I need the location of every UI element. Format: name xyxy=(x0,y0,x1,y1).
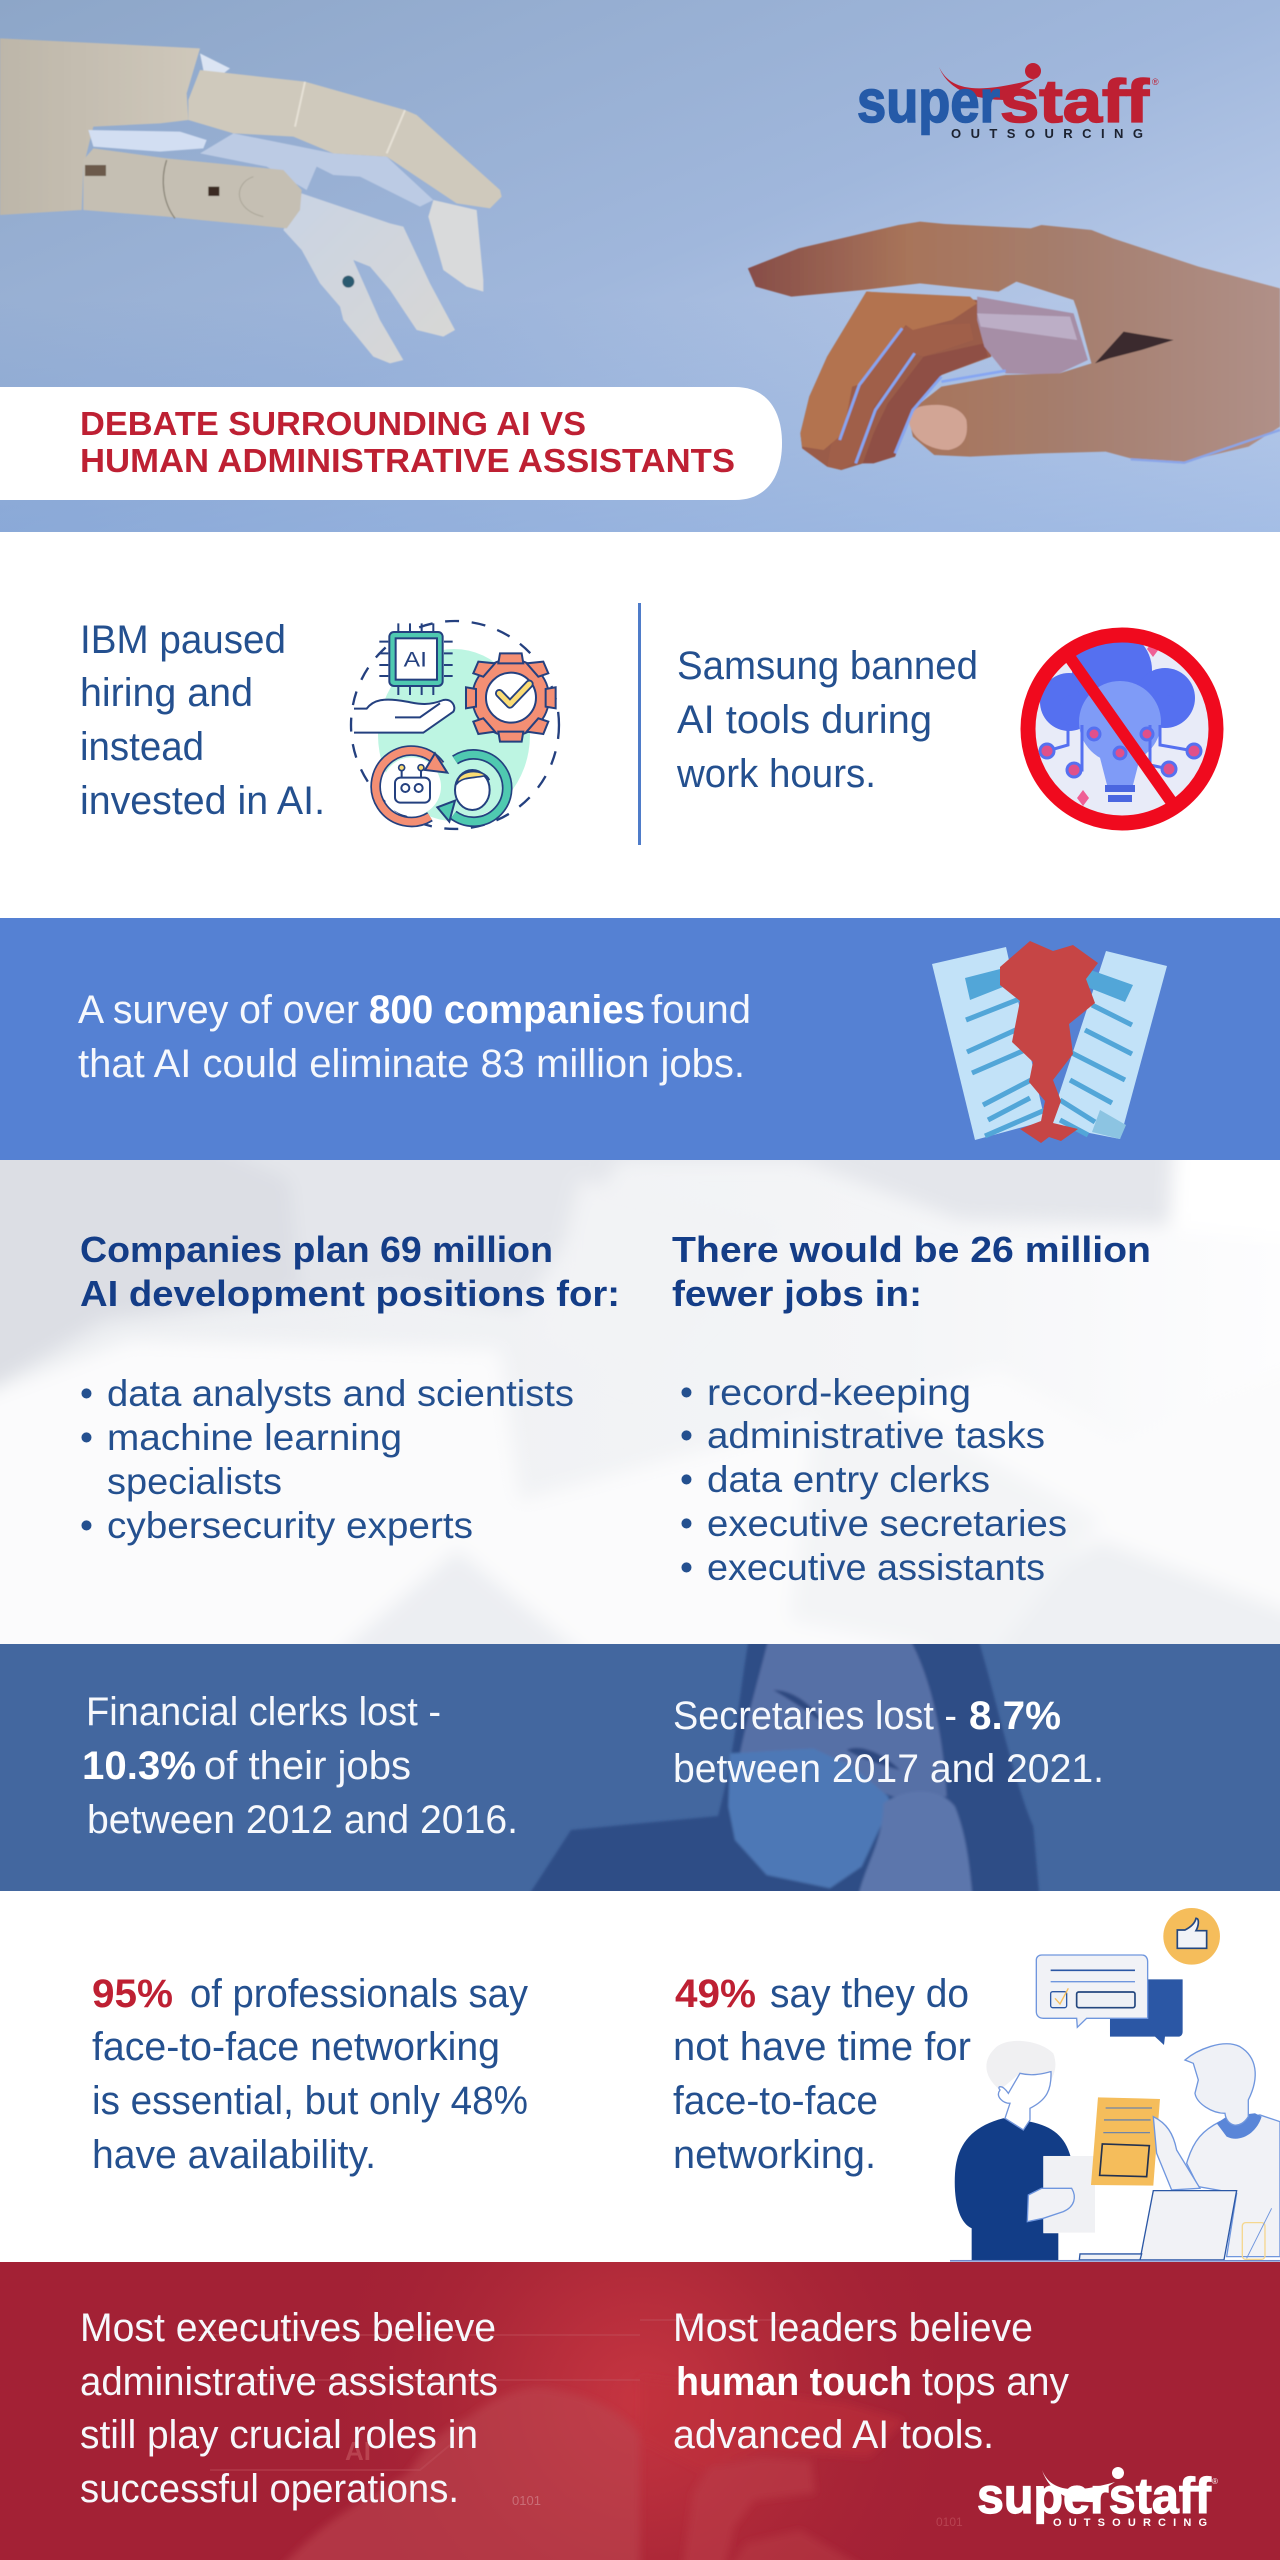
panel: networking xyxy=(0,1891,1280,2262)
divider xyxy=(638,603,641,845)
list: fewer jobs: • xyxy=(680,1503,693,1544)
text: financial clerks: Financial clerks lost - xyxy=(86,1690,441,1734)
panel: lost jobs band xyxy=(0,1633,1280,1903)
text: executives: successful operations. xyxy=(80,2467,459,2511)
text: survey: found xyxy=(651,988,751,1032)
text: secretaries: between 2017 and 2021. xyxy=(673,1747,1104,1791)
logo: superstaff top: super xyxy=(857,68,1000,135)
text: executives: still play crucial roles in xyxy=(80,2413,478,2457)
text: survey: that AI could eliminate 83 million jobs. xyxy=(78,1042,745,1086)
text: executives: Most executives believe xyxy=(80,2306,496,2350)
background photo: woman in mask xyxy=(523,1633,1040,1903)
text: Samsung: work hours. xyxy=(676,752,876,796)
text: leaders: tops any xyxy=(922,2360,1069,2404)
text: leaders: human touch xyxy=(676,2360,912,2404)
title xyxy=(80,405,735,479)
text: secretaries: 8.7% xyxy=(969,1694,1061,1738)
icon: chat bubbles xyxy=(1036,1955,1183,2045)
figure: left person xyxy=(955,2041,1095,2261)
illustration: two colleagues xyxy=(950,1908,1280,2262)
image: human hand xyxy=(748,222,1280,470)
text: 95 percent: is essential, but only 48% xyxy=(92,2079,528,2123)
text: IBM: invested in AI. xyxy=(80,779,325,823)
list: new positions: • xyxy=(80,1417,93,1458)
background photo: hands and circuitry xyxy=(200,2320,963,2560)
heading: 69 million: Companies plan 69 million xyxy=(80,1229,553,1270)
list: fewer jobs: • xyxy=(680,1547,693,1588)
logo: superstaff top xyxy=(857,63,1159,141)
text: 49 percent: networking. xyxy=(673,2133,876,2177)
background photo: hands and clipboard xyxy=(0,1140,1280,1670)
list: fewer jobs xyxy=(680,1372,1067,1588)
list: fewer jobs: record-keeping xyxy=(707,1372,971,1413)
background photo: hands and circuitry: AI xyxy=(345,2436,371,2466)
text: survey xyxy=(78,988,751,1086)
list: fewer jobs: • xyxy=(680,1372,693,1413)
logo: superstaff bottom: superstaff xyxy=(977,2468,1211,2524)
title: DEBATE SURROUNDING AI VS xyxy=(80,405,586,442)
text: 49 percent: face-to-face xyxy=(673,2079,878,2123)
text: Samsung: Samsung banned xyxy=(677,644,978,688)
heading: 69 million xyxy=(80,1229,620,1314)
text: secretaries xyxy=(673,1694,1104,1791)
panel: IBM and Samsung xyxy=(0,532,1280,918)
heading: 26 million: There would be 26 million xyxy=(672,1229,1151,1270)
text: 95 percent: of professionals say xyxy=(190,1972,528,2016)
list: fewer jobs: executive secretaries xyxy=(707,1503,1067,1544)
text: secretaries: Secretaries lost - xyxy=(673,1694,957,1738)
text: 95 percent xyxy=(92,1972,528,2177)
text: 95 percent: have availability. xyxy=(92,2133,376,2177)
text: 49 percent: 49% xyxy=(675,1972,756,2016)
title: HUMAN ADMINISTRATIVE ASSISTANTS xyxy=(80,442,735,479)
text: 49 percent: not have time for xyxy=(673,2025,971,2069)
text: leaders xyxy=(673,2306,1069,2457)
text: financial clerks: between 2012 and 2016. xyxy=(87,1798,518,1842)
logo: superstaff top: staff xyxy=(1000,68,1150,135)
text: executives xyxy=(80,2306,498,2511)
list: fewer jobs: administrative tasks xyxy=(707,1415,1045,1456)
background photo: hands and circuitry: 0101 xyxy=(936,2515,963,2529)
title pill xyxy=(0,387,782,500)
text: leaders: advanced AI tools. xyxy=(673,2413,994,2457)
text: 95 percent: 95% xyxy=(92,1972,173,2016)
text: financial clerks: 10.3% xyxy=(82,1744,196,1788)
logo: superstaff top: ® xyxy=(1152,77,1159,87)
panel: job positions xyxy=(0,1140,1280,1670)
text: leaders: Most leaders believe xyxy=(673,2306,1033,2350)
text: financial clerks: of their jobs xyxy=(204,1744,411,1788)
background photo: hands and circuitry: 0101 xyxy=(512,2493,541,2508)
text: executives: administrative assistants xyxy=(80,2360,498,2404)
panel: survey band xyxy=(0,918,1280,1160)
text: 49 percent xyxy=(673,1972,971,2177)
text: 49 percent: say they do xyxy=(770,1972,969,2016)
list: new positions xyxy=(80,1373,574,1546)
text: financial clerks xyxy=(82,1690,518,1842)
icon: AI process cycle xyxy=(351,621,559,829)
text: survey: A survey of over xyxy=(78,988,359,1032)
text: survey: 800 companies xyxy=(369,988,645,1032)
list: new positions: machine learning xyxy=(107,1417,402,1458)
heading: 69 million: AI development positions for: xyxy=(80,1273,620,1314)
list: new positions: cybersecurity experts xyxy=(107,1505,473,1546)
text: Samsung xyxy=(676,644,978,796)
logo: superstaff bottom: OUTSOURCING xyxy=(1053,2517,1207,2529)
figure: paper xyxy=(1091,2097,1160,2186)
list: new positions: specialists xyxy=(107,1461,282,1502)
text: IBM: instead xyxy=(80,725,204,769)
panel: human touch band xyxy=(0,2262,1280,2560)
list: fewer jobs: executive assistants xyxy=(707,1547,1045,1588)
heading: 26 million: fewer jobs in: xyxy=(672,1273,922,1314)
text: IBM: hiring and xyxy=(80,671,253,715)
icon: torn document xyxy=(932,941,1167,1143)
logo: superstaff bottom: ® xyxy=(1212,2477,1218,2486)
list: fewer jobs: data entry clerks xyxy=(707,1459,990,1500)
text: 95 percent: face-to-face networking xyxy=(92,2025,500,2069)
panel: hero xyxy=(0,0,1280,532)
figure: right person xyxy=(1153,2044,1280,2257)
figure: laptop xyxy=(950,2191,1280,2262)
icon: AI process cycle: AI xyxy=(404,648,427,672)
list: new positions: • xyxy=(80,1373,93,1414)
logo: superstaff top: OUTSOURCING xyxy=(951,126,1143,141)
icon: thumbs up xyxy=(1163,1908,1220,1965)
list: fewer jobs: • xyxy=(680,1415,693,1456)
icon: banned AI bulb xyxy=(1028,630,1216,823)
list: fewer jobs: • xyxy=(680,1459,693,1500)
text: IBM xyxy=(80,618,325,823)
text: IBM: IBM paused xyxy=(80,618,286,662)
image: robot hand xyxy=(0,38,502,363)
list: new positions: data analysts and scientists xyxy=(107,1373,574,1414)
list: new positions: • xyxy=(80,1505,93,1546)
text: Samsung: AI tools during xyxy=(677,698,932,742)
heading: 26 million xyxy=(672,1229,1151,1314)
